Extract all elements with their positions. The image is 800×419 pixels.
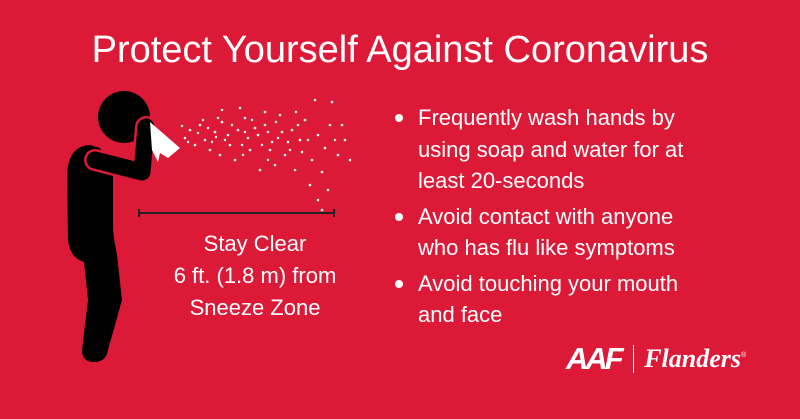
- illustration: sneezing person: [67, 91, 352, 362]
- icon: tissue: [150, 122, 180, 162]
- bullet list: least 20-seconds: [418, 168, 584, 193]
- bullet list: Frequently wash hands by: [418, 105, 675, 130]
- icon: person: [67, 91, 150, 362]
- caption: stay clear: 6 ft. (1.8 m) from: [174, 263, 336, 288]
- logo: ®: [741, 352, 746, 359]
- bullet list: [395, 105, 684, 327]
- logo: [565, 341, 746, 376]
- caption: stay clear: Sneeze Zone: [190, 295, 320, 320]
- bullet list: using soap and water for at: [418, 136, 683, 162]
- caption: stay clear: Stay Clear: [204, 231, 306, 256]
- bullet list: Avoid touching your mouth: [418, 270, 678, 296]
- bullet list: Avoid contact with anyone: [418, 204, 673, 228]
- distance line: [139, 209, 334, 217]
- bullet list: who has flu like symptoms: [418, 235, 675, 260]
- caption: stay clear: [174, 231, 336, 320]
- logo: Flanders: [644, 344, 741, 373]
- sneeze droplets: [181, 99, 351, 211]
- title: Protect Yourself Against Coronavirus: [92, 29, 708, 71]
- logo: AAF: [566, 341, 621, 376]
- bullet list: and face: [418, 302, 502, 327]
